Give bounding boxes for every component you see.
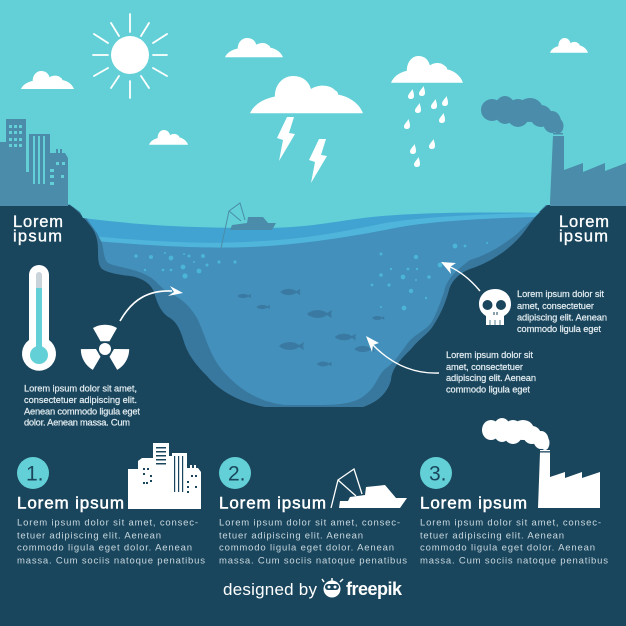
step 2 heading: Lorem ipsum — [219, 494, 326, 512]
text block: left: Aenean commodo ligula eget — [24, 406, 140, 416]
step 1 text: Lorem ipsum dolor sit amet, consec- — [17, 518, 198, 528]
text block: left: Lorem ipsum dolor sit amet, — [24, 384, 137, 394]
heading: left: Lorem — [13, 213, 63, 231]
icon: city — [128, 443, 201, 509]
fish — [237, 289, 384, 366]
footer credit: designed by — [223, 580, 318, 599]
step 3 heading: Lorem ipsum — [420, 494, 527, 512]
text block: middle: Lorem ipsum dolor sit — [446, 350, 533, 360]
upper water band — [86, 212, 540, 242]
footer credit — [223, 578, 403, 599]
arrow: radiation to lake — [120, 286, 183, 321]
pollution bubbles — [134, 242, 488, 310]
text block: skull: adipiscing elit. Aenean — [517, 312, 607, 322]
number badge 1 — [17, 457, 49, 489]
lake cross-section — [60, 200, 560, 410]
icon: thermometer — [22, 265, 56, 371]
step 1 heading: Lorem ipsum — [17, 494, 124, 512]
step 3 text: massa. Cum sociis natoque penatibus — [420, 556, 608, 566]
sky background — [0, 0, 626, 205]
step 2 text: commodo ligula eget dolor. Aenean — [219, 542, 394, 554]
lake rim — [68, 204, 548, 407]
step 3 — [420, 418, 608, 566]
factory smoke — [481, 96, 564, 134]
number badge 2 — [219, 457, 251, 489]
icon: factory — [482, 418, 600, 508]
step 1 text: massa. Cum sociis natoque penatibus — [17, 556, 205, 566]
footer credit: freepik — [346, 579, 403, 599]
dark ground background — [0, 205, 626, 626]
lake water — [102, 212, 540, 405]
icon: radiation — [78, 325, 132, 372]
heading: right: ipsum — [559, 228, 608, 246]
number badge 1: 1. — [26, 462, 44, 486]
rain drops — [404, 86, 448, 167]
text block: middle: commodo ligula eget — [446, 384, 530, 394]
text block: skull: amet, consectetuer — [517, 301, 594, 311]
step 2 text: tetuer adipiscing elit. Aenean — [219, 530, 363, 542]
text block: middle: adipiscing elit. Aenean — [446, 373, 536, 383]
step 3 text: Lorem ipsum dolor sit amet, consec- — [420, 518, 601, 528]
number badge 2: 2. — [228, 462, 246, 486]
text block: left: dolor. Aenean massa. Cum — [24, 418, 130, 428]
heading: right: Lorem — [559, 213, 609, 231]
step 1 text: commodo ligula eget dolor. Aenean — [17, 542, 192, 554]
light water band — [60, 213, 540, 248]
text block: skull: commodo ligula eget — [517, 324, 601, 334]
step 3 text: commodo ligula eget dolor. Aenean — [420, 542, 595, 554]
sun — [93, 14, 167, 98]
number badge 3 — [420, 457, 452, 489]
icon: skull — [479, 289, 511, 325]
step 3 text: tetuer adipiscing elit. Aenean — [420, 530, 564, 542]
text block: middle: amet, consectetuer — [446, 362, 523, 372]
arrow: skull to lake — [441, 262, 480, 291]
step 2 text: massa. Cum sociis natoque penatibus — [219, 556, 407, 566]
factory silhouette — [481, 96, 626, 206]
city silhouette — [0, 119, 68, 206]
arrow: text to lake — [366, 336, 439, 373]
step 1 — [17, 443, 205, 566]
text block: left: consectetuer adipiscing elit. — [24, 395, 137, 405]
icon: boat — [331, 469, 407, 508]
number badge 3: 3. — [429, 462, 447, 486]
icon: freepik mascot — [322, 578, 343, 598]
text block: skull: Lorem ipsum dolor sit — [517, 289, 604, 299]
clouds — [21, 38, 588, 145]
step 2 text: Lorem ipsum dolor sit amet, consec- — [219, 518, 400, 528]
step 1 text: tetuer adipiscing elit. Aenean — [17, 530, 161, 542]
lightning bolts — [277, 117, 327, 183]
sky above water — [69, 204, 547, 228]
heading: left: ipsum — [13, 228, 62, 246]
lake water and bands — [86, 212, 540, 405]
step 2 — [219, 457, 407, 566]
fishing boat — [221, 203, 276, 248]
